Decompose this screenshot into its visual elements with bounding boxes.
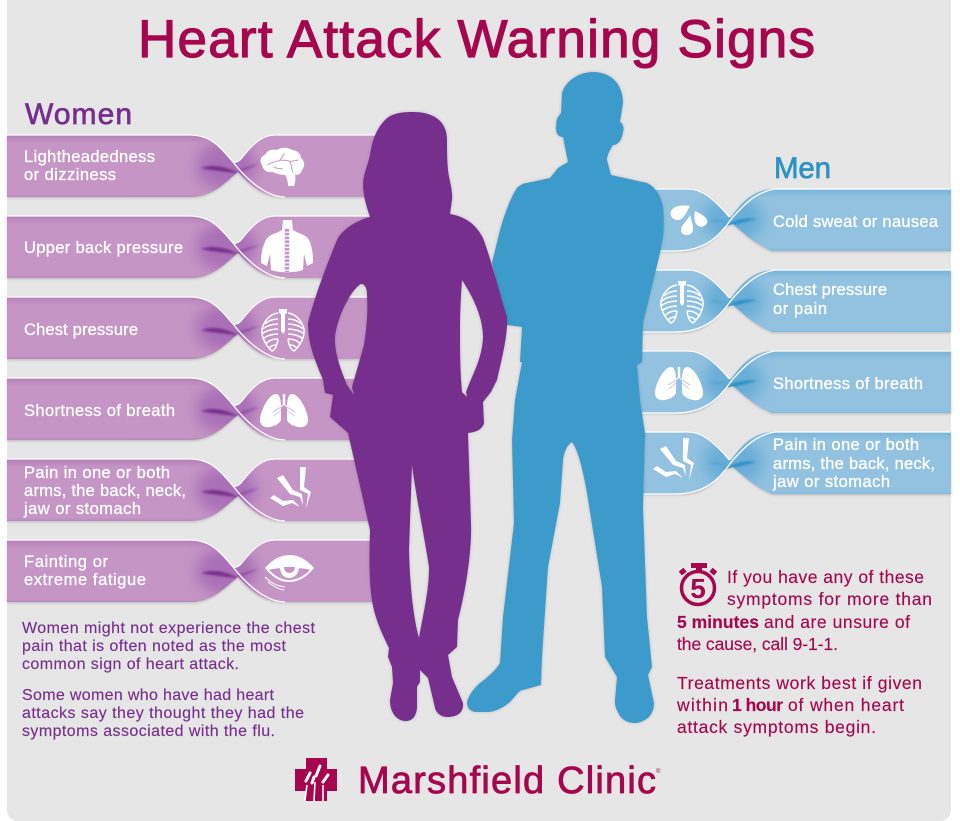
ribbon: Pain in arms, back, neck, jaw or stomach xyxy=(635,432,951,494)
ribbon: Cold sweat or nausea xyxy=(635,189,951,251)
ribbon: Upper back pressure xyxy=(7,216,400,278)
ribbon: Chest pressure xyxy=(7,297,400,359)
heading: Men: Men xyxy=(774,152,831,185)
icon: rib cage xyxy=(661,281,703,323)
ribbon: Pain in arms, back, neck, jaw or stomach: arms, the back, neck, xyxy=(773,455,935,473)
ribbon: Fainting or extreme fatigue: extreme fatigue xyxy=(24,571,146,589)
icon: pain bolts xyxy=(653,438,694,480)
text block: women note 2: symptoms associated with the flu. xyxy=(22,723,275,740)
ribbon: Fainting or extreme fatigue xyxy=(7,540,400,602)
text block: call 9-1-1: the cause, call 9-1-1. xyxy=(677,634,838,654)
text block: women note 1: common sign of heart attack. xyxy=(22,656,239,673)
ribbon: Pain in arms, back, neck, jaw or stomach xyxy=(7,459,400,521)
ribbon: Pain in arms, back, neck, jaw or stomach: jaw or stomach xyxy=(23,500,141,518)
text block: women note 2 xyxy=(22,687,304,740)
icon: drooping eye xyxy=(265,555,314,590)
text block: call 9-1-1: If you have any of these xyxy=(727,567,924,587)
text block: treatments: of when heart xyxy=(788,695,904,715)
ribbon: Chest pressure: Chest pressure xyxy=(24,321,138,339)
logo: Marshfield Clinic: Marshfield Clinic xyxy=(358,760,656,802)
text block: treatments xyxy=(676,673,922,737)
ribbon: Cold sweat or nausea: Cold sweat or nausea xyxy=(773,213,939,231)
ribbon: Pain in arms, back, neck, jaw or stomach: jaw or stomach xyxy=(772,473,890,491)
icon: pain bolts xyxy=(270,467,311,509)
ribbon: Chest pressure or pain: or pain xyxy=(773,300,827,318)
heading: Women: Women xyxy=(25,98,132,131)
text block: treatments: attack symptoms begin. xyxy=(677,717,876,737)
ribbon: Shortness of breath xyxy=(635,351,951,413)
title: Heart Attack Warning Signs xyxy=(138,10,815,69)
text block: call 9-1-1: 5 minutes xyxy=(677,612,759,632)
ribbon: Lightheadedness or dizziness: Lightheadedness xyxy=(24,148,155,166)
text block: call 9-1-1: and are unsure of xyxy=(764,612,910,632)
ribbon: Shortness of breath: Shortness of breath xyxy=(24,402,175,420)
ribbon: Shortness of breath: Shortness of breath xyxy=(773,375,923,393)
icon: cross with wheat xyxy=(295,758,337,801)
ribbon: Shortness of breath xyxy=(7,378,400,440)
text block: call 9-1-1 xyxy=(677,567,932,654)
logo: Marshfield Clinic: ® xyxy=(656,768,661,775)
ribbon: Pain in arms, back, neck, jaw or stomach: arms, the back, neck, xyxy=(24,482,186,500)
ribbon: Lightheadedness or dizziness: or dizziness xyxy=(24,166,116,184)
ribbon: Lightheadedness or dizziness xyxy=(7,135,400,197)
text block: treatments: 1 hour xyxy=(732,695,783,715)
text block: women note 1: pain that is often noted as the most xyxy=(22,638,287,655)
text block: women note 1 xyxy=(22,620,316,673)
ribbon: Chest pressure or pain: Chest pressure xyxy=(773,281,887,299)
text block: women note 2: Some women who have had heart xyxy=(22,687,275,704)
icon: five minute stopwatch xyxy=(679,563,717,604)
ribbon: Pain in arms, back, neck, jaw or stomach: Pain in one or both xyxy=(24,464,170,482)
text block: treatments: Treatments work best if given xyxy=(677,673,922,693)
icon: rib cage xyxy=(262,309,304,351)
icon: sweat drops xyxy=(671,206,707,235)
silhouette: man xyxy=(467,72,664,723)
icon: lungs xyxy=(655,367,703,400)
text block: women note 2: attacks say they thought they had the xyxy=(22,705,304,722)
ribbon: Pain in arms, back, neck, jaw or stomach: Pain in one or both xyxy=(773,436,919,454)
silhouette: woman xyxy=(308,112,507,721)
text block: women note 1: Women might not experience the chest xyxy=(22,620,316,637)
text block: call 9-1-1: symptoms for more than xyxy=(727,589,932,609)
ribbon: Upper back pressure: Upper back pressure xyxy=(24,239,183,257)
icon: upper back xyxy=(261,220,313,272)
icon: brain xyxy=(261,148,304,186)
icon: lungs xyxy=(260,394,308,427)
text block: treatments: within xyxy=(676,695,728,715)
ribbon: Chest pressure or pain xyxy=(635,270,951,332)
ribbon: Fainting or extreme fatigue: Fainting or xyxy=(24,553,108,571)
icon: five minute stopwatch: 5 xyxy=(690,573,706,604)
